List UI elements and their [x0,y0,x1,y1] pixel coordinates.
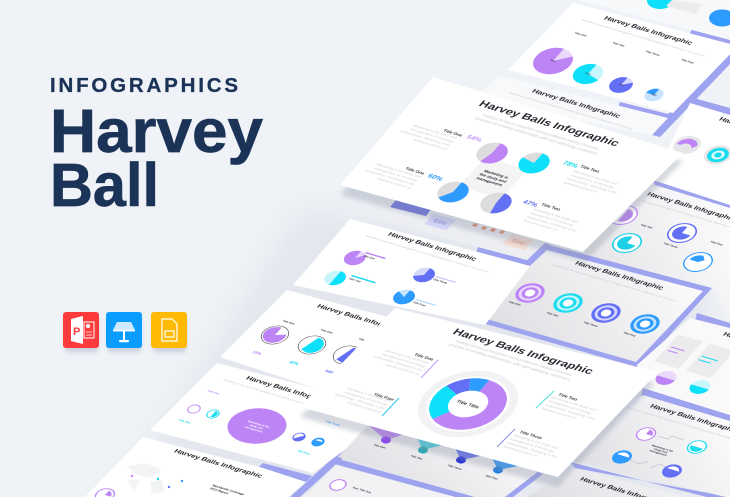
heading: Harvey Balls Infographic [244,375,336,406]
big purple circle: study and [249,423,264,430]
pie labels: Title One [573,31,588,38]
center note box [459,157,527,199]
panel: slide at top right edge [578,0,730,40]
heading: Harvey Balls Infographic [386,231,478,262]
bar: cyan [348,275,376,287]
label: title one 54 [442,128,484,144]
funnel labels [372,443,500,481]
pie: indigo [409,266,439,284]
label: title two 47 [521,199,562,212]
ball: indigo half [658,462,686,480]
callout: title two: relationships. Marketing is the [544,403,596,421]
center note box: the study and [478,172,508,184]
ball labels: Title Three [582,321,599,328]
callout: title two: Title Two [557,392,579,402]
labels: Title Two [178,418,192,425]
body text lower right: relationships. Marketing is the [526,215,578,233]
small ball cyan [204,409,222,419]
labels: Title One [206,389,221,396]
body text lower left: relationships. Marketing is the [363,169,415,186]
heading: Harvey Balls Infographic [645,191,730,222]
panel: right slide with ring icons [653,103,730,205]
label: title two 47: Title Two [540,202,562,212]
map dots [131,475,183,488]
pie labels [573,31,696,65]
panel: slide with descending pie row [508,3,730,113]
ball: indigo concentric [586,300,626,326]
title: Ball: Ball [50,151,159,219]
callout: title four: relationships. Marketing is the [333,393,385,410]
labels: Title Three [324,420,341,427]
panel: slide behind main card [470,76,668,135]
pie: purple 87 percent: 95% [549,59,558,63]
report label: 2021 Report [209,487,230,495]
subtitle: Marketing is the study and management of exchange relationships. Marketing is the business [222,378,349,418]
funnel labels: Title One [372,443,387,450]
panel: donut Harvey ball card [300,308,658,477]
callout: title three: relationships. Marketing is the [506,441,558,459]
body text top left: business process of [412,138,449,151]
panel: slide with bars and value boxes [363,180,592,260]
callout: title four: management of exchange [343,391,389,406]
label: title two 78 [561,160,601,174]
heading: Harvey Balls Infographic [172,448,264,479]
percents and labels: 42% [288,360,300,366]
small ball blue [309,436,327,448]
panel: slide with world map [85,437,306,497]
ball labels: Title One [507,300,522,307]
ball: cyan outline [684,439,710,455]
percents and labels [251,319,372,375]
percents and labels: Title One [319,328,334,335]
ball: purple outline [256,323,294,347]
heading: Harvey Balls Infographic [530,88,622,119]
percents and labels: Title One [357,337,372,344]
value box orange: $3M [509,238,526,247]
pie: purple 54 percent [470,139,514,167]
callout: title two [536,391,602,424]
percents and labels: Title One [281,319,296,326]
pie: blue [389,288,419,306]
card one [654,334,703,369]
grey card top [666,0,702,14]
subtitle: Marketing is the study and management of exchange relationships. Marketing is the business [508,91,635,131]
callout: title four: business process of [346,401,383,414]
icon: cyan ball top [647,0,673,9]
pie: cyan [320,269,350,287]
callout: title three [497,429,564,462]
purple bar block [390,200,432,216]
icon: purple swoosh pin [668,133,706,157]
soft shadow field [120,210,730,497]
pie: cyan 78 percent [512,149,556,177]
panel: slide with outlined ring balls [545,185,730,320]
purple frame bands [258,28,730,497]
ring labels [640,223,725,249]
body text top left: relationships. Marketing is the [399,130,451,147]
pie: blue [641,87,667,103]
body text top left: Marketing is the study and [412,124,458,140]
label: title one 60 [404,166,445,183]
body text lower right: Marketing is the study and [532,208,579,224]
percents and labels: 54% [324,369,336,375]
panel: bottom right slide [526,468,730,497]
report label: Worldwide Coverage [211,484,245,496]
ring ball [327,478,349,492]
world map blobs [127,463,164,494]
icon: Google Slides [151,312,187,348]
callout: title one: management of exchange [381,353,427,368]
body text upper right: Marketing is the study and [572,170,619,186]
callout: title three: management of exchange [509,438,555,453]
bar: blue [412,299,436,309]
icon: PowerPoint [63,312,99,348]
subtitle: Marketing is the study and management of exchange relationships. Marketing is the business [551,263,678,303]
label: title two 78: Title Two [579,164,601,174]
subtitle: process of creating relationships with and satisfying customers. [475,116,600,156]
callout: title one [368,347,438,378]
heading: Harvey Balls Infographic [573,260,665,291]
subtitle: Marketing is the study and management of exchange relationships. Marketing is the business [455,339,638,396]
body text lower right: management of exchange [529,212,575,227]
card two [686,344,730,378]
heading: Harvey Balls Infographic [602,15,694,46]
ring labels: Title Four [709,240,725,247]
ring: blue [678,250,718,274]
callout: title two: Marketing is the study and [550,396,597,412]
big purple circle [217,402,297,450]
body text top left: management of exchange [409,128,455,143]
shadow of main card 1 [340,85,683,262]
callout: title three: Marketing is the study and [512,434,559,450]
shadow of main card 2 [300,316,655,487]
ring labels: Title Three [662,242,679,249]
center note box: management. [475,176,505,187]
callout: title four: Marketing is the study and [346,387,392,403]
callout: title two: management of exchange [547,400,593,415]
label: title two 47: 47% [521,199,540,209]
heading: Harvey Balls Infographic [450,327,596,377]
callout: title one: Title One [413,352,435,362]
body text lower left: management of exchange [373,167,419,182]
ball: cyan concentric [548,290,588,316]
center note: Marketing is the [651,444,674,453]
callout: title two: business process of [541,407,577,420]
funnel indigo [455,448,480,464]
pie: cyan partial [686,378,714,396]
panel: slide with concentric balls in purple frame [465,244,712,368]
icon: PowerPoint: P [73,326,80,338]
pie labels: Title Three [644,50,661,57]
funnel teal [417,438,443,454]
body text lower left: Marketing is the study and [376,163,422,179]
percents and labels: 19% [251,350,263,356]
center note: management. [648,449,669,457]
label: Your Title One [351,486,373,494]
pie: indigo 47 percent [474,189,518,217]
subtitle: Marketing is the study and management of exchange relationships. Marketing is the business [580,18,707,58]
donut chart [399,361,537,447]
label: title one 54: Title One [442,128,464,138]
callout: title three: Title Three [518,430,544,440]
body text upper right: relationships. Marketing is the [566,177,618,195]
value box purple [424,213,456,231]
center note: study and [653,447,669,454]
labels: Title Four [296,449,312,456]
body text lower left: business process of [376,177,413,190]
ring: cyan [607,231,647,255]
funnel purple [368,425,405,444]
panel: slide with funnels [338,423,540,497]
panel: lower right slide with connected balls [570,395,730,497]
bar: purple: Title One [362,254,376,260]
value box purple: $3M [431,218,448,227]
ball labels [507,300,638,338]
heading: Harvey Balls Infographic [648,403,730,434]
ring: indigo [662,221,702,245]
ball: blue concentric [625,311,665,337]
pie: cyan: 50% [584,72,593,76]
pie: blue: 25% [650,93,659,97]
label: title two 78: 78% [561,160,580,170]
label: title one 54: 54% [465,134,484,144]
pie labels: Title Two [612,41,626,48]
pie: purple 87 percent [525,44,581,78]
funnel blue [492,458,518,474]
connectors [630,436,684,468]
bar: indigo: Title Three [432,278,449,285]
callout: title four: Title Four [372,392,396,402]
callout: title four [330,385,399,416]
callout: title one: Marketing is the study and [384,349,430,365]
center note box: Marketing is [483,169,510,179]
ball labels: Title Two [546,311,560,318]
pie: indigo [605,75,637,95]
icon shadows [65,317,186,352]
panel: bottom slide with purple ring [305,465,455,497]
ring labels: Title Two [640,223,654,230]
funnel labels: Title Two [410,454,424,461]
funnel labels: Title Four [484,474,500,481]
body text upper right: business process of [563,181,599,194]
label: title one 60: Title One [404,166,426,176]
label: title one 60: 60% [426,173,445,183]
title: INFOGRAPHICS: INFOGRAPHICS [50,74,238,97]
panel: slide with large central circle [150,363,400,473]
ball: purple concentric [510,280,550,306]
funnel labels: Title Three [446,464,463,471]
icon: blue ball top [709,10,730,26]
heading: Harvey Balls Infographic [315,303,407,334]
bar: purple [362,252,386,263]
body text upper right: management of exchange [569,174,615,189]
panel: slide with outlined balls and percents [220,290,455,392]
ring: purple [603,203,643,227]
icon: cyan target pin [698,143,730,167]
callout: title one: relationships. Marketing is the [371,355,423,372]
value box orange [502,233,534,251]
icon: Keynote [106,312,142,348]
pie: cyan [567,61,609,87]
ring ball purple [92,487,118,497]
bar: cyan: Title Two [348,277,362,283]
labels [178,389,341,456]
ball labels: Title Four [622,331,638,338]
bar: blue: Title Four [412,301,428,308]
body text lower right: business process of [523,219,559,232]
ball: indigo outline [328,343,366,367]
small ball indigo [290,431,308,443]
heading: Harvey Balls Infographic [476,99,622,149]
pie: blue 60 percent [431,178,475,206]
bar: indigo [432,276,456,286]
subtitle: Marketing is the study and management of exchange relationships. Marketing is the business [482,113,665,170]
pie: purple partial [652,369,680,387]
donut chart: Title Title [455,399,480,410]
callout: title one: business process of [384,363,421,376]
panel: main Harvey balls card [340,77,683,252]
pie labels: Title Four [680,58,696,65]
panel: right slide with grey cards [637,318,730,415]
ball: cyan outline [293,333,331,357]
ball: blue half [608,448,636,466]
pie: purple [340,249,370,267]
big purple circle: management. [244,425,264,434]
orange squares [472,223,505,234]
small ball purple [185,404,203,414]
ball: purple outline [633,426,659,442]
title: Harvey: Harvey [50,97,263,165]
panel: slide with pies and bars [293,219,530,325]
pie: indigo: 75% [617,83,626,87]
subtitle: process of creating relationships with and satisfying customers. [448,342,573,382]
big purple circle: Marketing is the [247,420,270,429]
callout: title three: business process of [503,445,539,458]
subtitle: Marketing is the study and management of exchange relationships. Marketing is the business [364,234,491,274]
